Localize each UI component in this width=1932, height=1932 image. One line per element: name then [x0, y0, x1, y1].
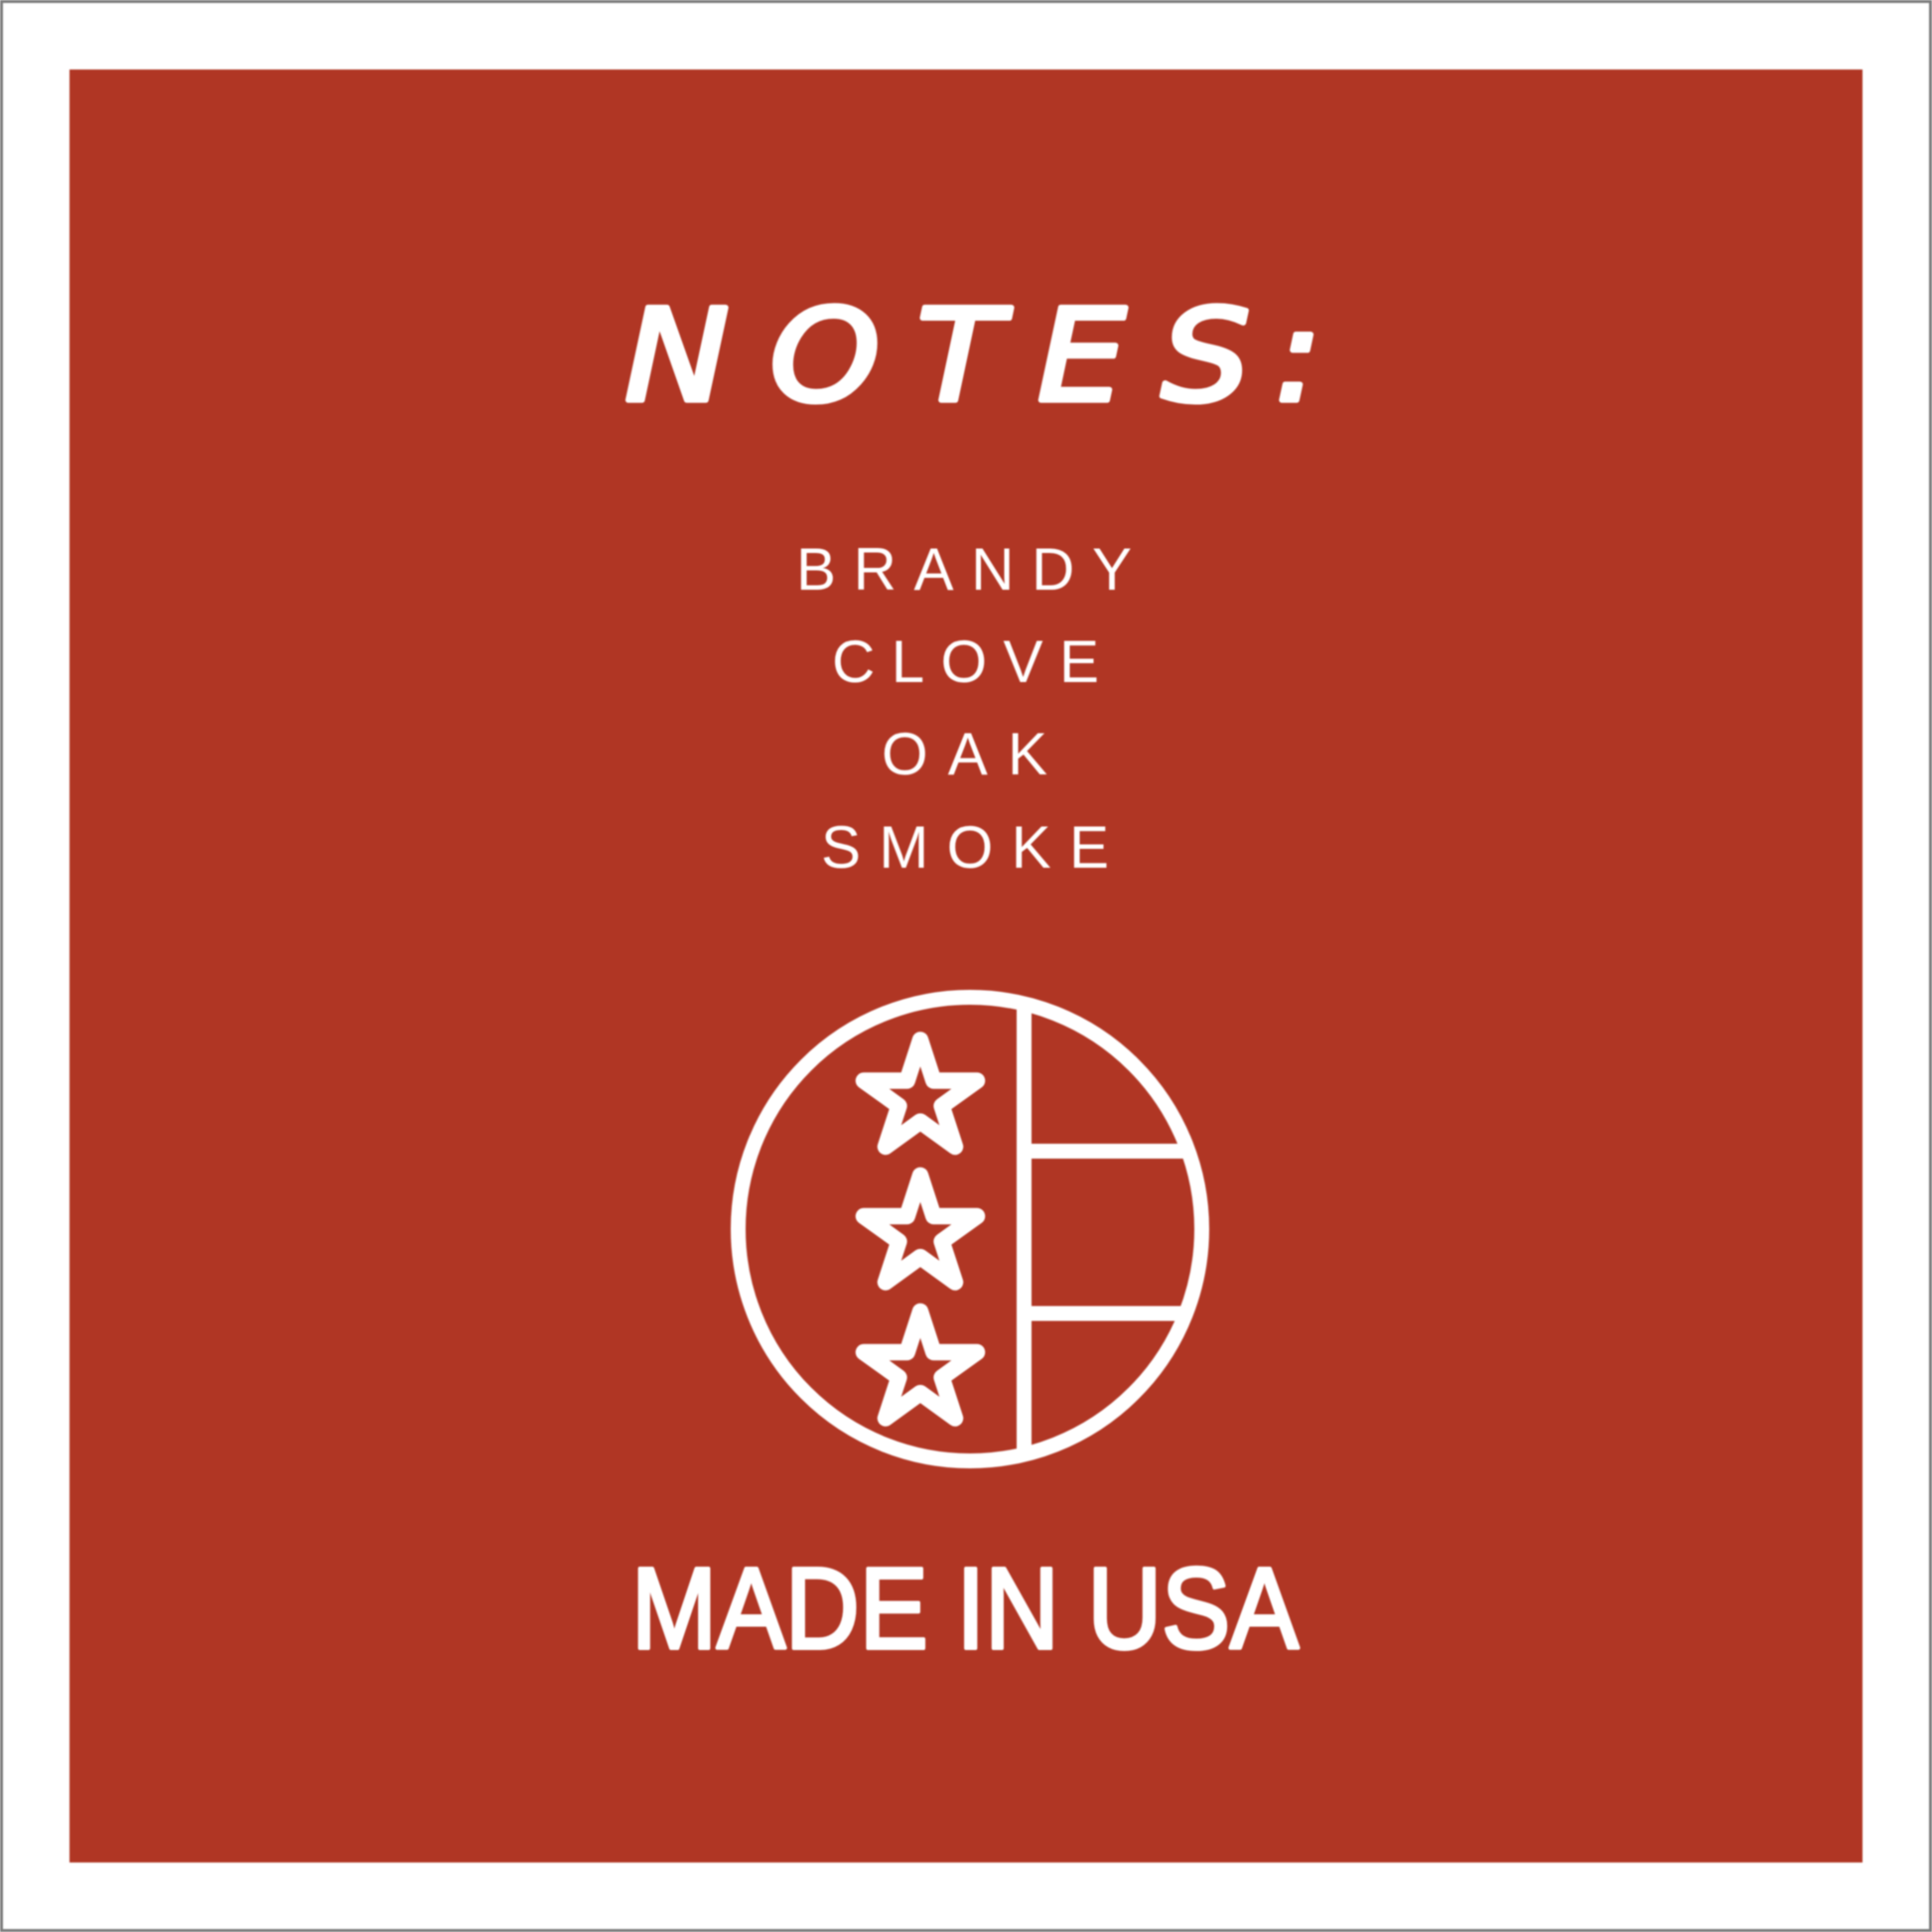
flag stripes [1025, 1005, 1186, 1454]
icon: american flag circle [739, 997, 1201, 1461]
note: smoke: SMOKE [821, 814, 1109, 881]
note: brandy: BRANDY [796, 536, 1132, 603]
icon outline: circle [739, 997, 1201, 1461]
note: oak: OAK [882, 721, 1047, 787]
icon: three stars [864, 1040, 977, 1418]
heading: notes: NOTES: [624, 282, 1321, 430]
note: clove: CLOVE [832, 628, 1099, 695]
text block: tasting notes [796, 536, 1132, 881]
label: made in usa: MADE IN USA [631, 1544, 1300, 1673]
